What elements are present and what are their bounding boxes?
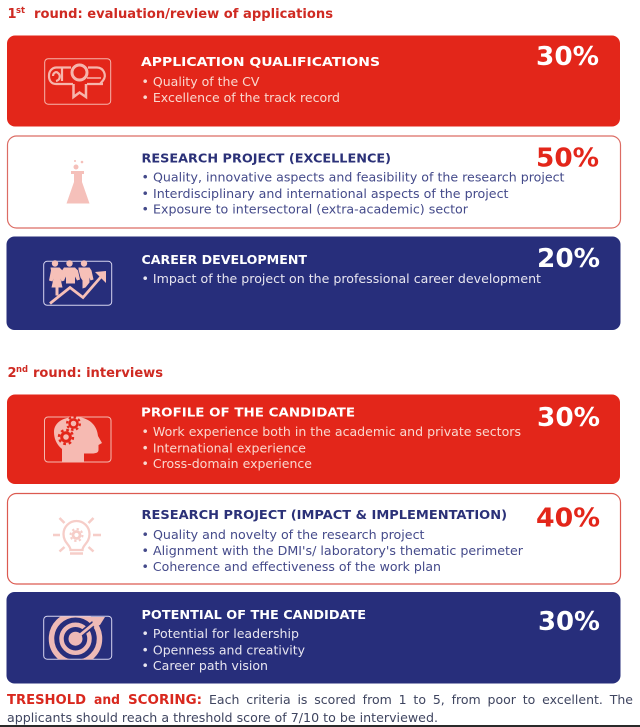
- icon: target with arrow: [44, 615, 112, 663]
- heading: second round: nd: [16, 365, 28, 375]
- panel: research project excellence: [8, 136, 620, 228]
- heading: second round: 2: [8, 366, 17, 381]
- panel: research project impact and implementation: [8, 494, 620, 584]
- bullet list: [142, 528, 524, 574]
- bullet list: • Exposure to intersectoral (extra-academic) sector: [142, 202, 469, 216]
- bullet list: [142, 170, 565, 216]
- percentage: 20%: [537, 244, 600, 274]
- bullet list: • Quality, innovative aspects and feasibility of the research project: [142, 170, 565, 184]
- panel: application qualifications: [7, 36, 620, 126]
- bullet list: • Career path vision: [142, 659, 268, 673]
- bullet list: • Work experience both in the academic and private sectors: [142, 425, 521, 439]
- heading text: RESEARCH PROJECT (IMPACT & IMPLEMENTATION): [142, 507, 507, 522]
- icon: diploma: [45, 59, 111, 104]
- percentage: 50%: [536, 144, 599, 174]
- bullet list: • Quality of the CV: [142, 75, 260, 89]
- text block: threshold and scoring: applicants should reach a threshold score of 7/10 to be interviewed.: [7, 711, 438, 725]
- text block: threshold and scoring: SCORING:: [128, 692, 202, 708]
- panel: career development: [6, 236, 620, 330]
- heading: first round: 1: [8, 7, 17, 22]
- bullet list: • Quality and novelty of the research project: [142, 528, 425, 542]
- heading text: APPLICATION QUALIFICATIONS: [141, 54, 380, 69]
- bullet list: [142, 425, 521, 471]
- heading text: CAREER DEVELOPMENT: [142, 252, 307, 267]
- bullet list: • Potential for leadership: [142, 627, 299, 641]
- bullet list: • Openness and creativity: [142, 644, 305, 658]
- icon: flask: [66, 160, 90, 204]
- percentage: 30%: [536, 42, 599, 72]
- text block: threshold and scoring: and: [94, 692, 120, 708]
- heading text: POTENTIAL OF THE CANDIDATE: [142, 607, 366, 622]
- bullet text: • Impact of the project on the professional career development: [142, 272, 541, 286]
- bullet list: • Cross-domain experience: [142, 457, 312, 471]
- bullet list: • Interdisciplinary and international aspects of the project: [142, 187, 509, 201]
- text block: threshold and scoring: TRESHOLD: [7, 692, 86, 708]
- percentage: 30%: [537, 403, 600, 433]
- heading: second round: round: interviews: [33, 366, 163, 381]
- panel: profile of the candidate: [7, 394, 620, 484]
- text block: threshold and scoring: [7, 692, 633, 725]
- text block: threshold and scoring: Each criteria is scored from 1 to 5, from poor to excellent. The: [209, 693, 633, 707]
- heading text: PROFILE OF THE CANDIDATE: [141, 404, 355, 420]
- percentage: 40%: [536, 504, 600, 534]
- bullet list: • International experience: [142, 442, 306, 456]
- bullet list: • Alignment with the DMI's/ laboratory's thematic perimeter: [142, 544, 524, 558]
- icon: head with gears: [44, 417, 111, 462]
- bullet list: [142, 627, 305, 673]
- bullet list: • Coherence and effectiveness of the work plan: [142, 560, 441, 574]
- panel: potential of the candidate: [6, 592, 620, 684]
- icon: light bulb with gear: [53, 518, 101, 554]
- heading: first round: st: [16, 6, 25, 16]
- heading text: RESEARCH PROJECT (EXCELLENCE): [142, 150, 391, 166]
- icon: people and rising arrow: [44, 260, 112, 305]
- bullet list: • Excellence of the track record: [142, 91, 340, 105]
- percentage: 30%: [538, 607, 600, 637]
- bullet list: [142, 75, 340, 105]
- heading: first round: round: evaluation/review of applications: [34, 7, 333, 22]
